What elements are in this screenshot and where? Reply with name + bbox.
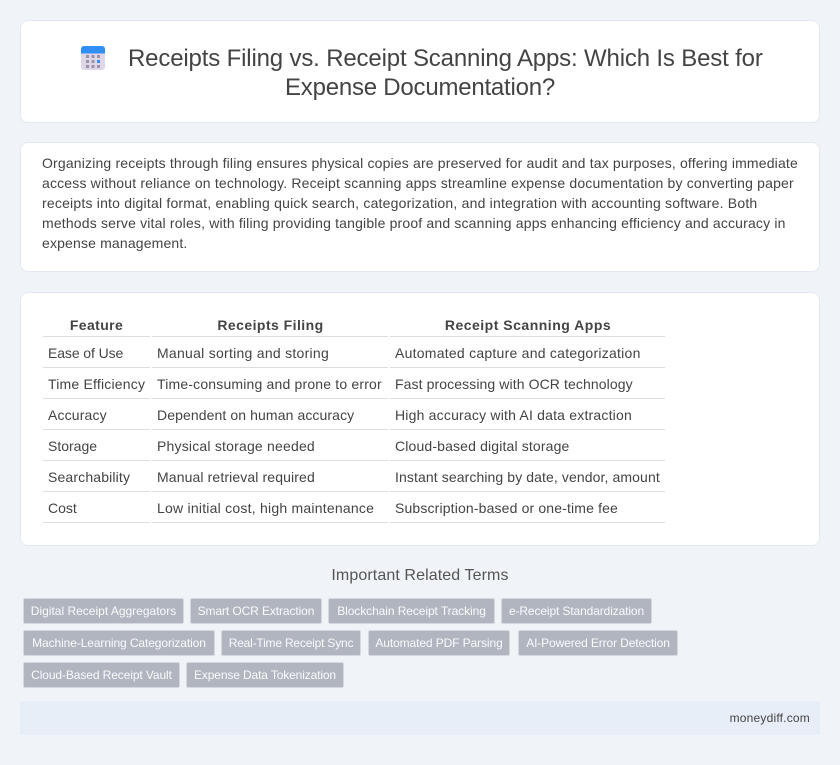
comparison table card xyxy=(20,292,820,546)
related terms tags: Smart OCR Extraction xyxy=(198,604,314,618)
comparison table: Instant searching by date, vendor, amount xyxy=(395,469,660,485)
source credit: moneydiff.com xyxy=(730,711,810,725)
comparison table: Storage xyxy=(48,438,97,454)
related terms tags: Automated PDF Parsing xyxy=(375,636,503,650)
related terms tags: Machine-Learning Categorization xyxy=(32,636,206,650)
title: Receipts Filing vs. Receipt Scanning Apps: Which Is Best for xyxy=(128,45,763,72)
comparison table: Receipt Scanning Apps xyxy=(445,317,611,333)
comparison table: Manual retrieval required xyxy=(157,469,315,485)
footer xyxy=(20,701,820,735)
description card xyxy=(20,142,820,272)
related terms heading: Important Related Terms xyxy=(331,567,509,584)
related terms tags: Blockchain Receipt Tracking xyxy=(337,604,486,618)
comparison table: Searchability xyxy=(48,469,130,485)
description text xyxy=(42,155,798,251)
title xyxy=(128,45,763,101)
description text: expense management. xyxy=(42,235,187,251)
related terms tags: AI-Powered Error Detection xyxy=(526,636,670,650)
comparison table: Automated capture and categorization xyxy=(395,345,641,361)
comparison table: Subscription-based or one-time fee xyxy=(395,500,618,516)
comparison table: Feature xyxy=(70,317,123,333)
title: Expense Documentation? xyxy=(285,74,555,101)
comparison table xyxy=(43,317,665,523)
comparison table: Manual sorting and storing xyxy=(157,345,329,361)
related terms tags xyxy=(23,598,678,688)
comparison table: Physical storage needed xyxy=(157,438,315,454)
description text: methods serve vital roles, with filing providing tangible proof and scanning apps enhancing efficiency and accuracy in xyxy=(42,215,786,231)
comparison table: Receipts Filing xyxy=(217,317,324,333)
comparison table: Accuracy xyxy=(48,407,107,423)
comparison table: Cost xyxy=(48,500,77,516)
description text: access without reliance on technology. Receipt scanning apps streamline expense documentation by converting paper xyxy=(42,175,794,191)
comparison table: Ease of Use xyxy=(48,345,123,361)
title card xyxy=(20,20,820,123)
comparison table: Time Efficiency xyxy=(48,376,145,392)
comparison table: Fast processing with OCR technology xyxy=(395,376,633,392)
description text: receipts into digital format, enabling quick search, categorization, and integration with accounting software. Both xyxy=(42,195,757,211)
comparison table: Low initial cost, high maintenance xyxy=(157,500,374,516)
description text: Organizing receipts through filing ensures physical copies are preserved for audit and tax purposes, offering immediate xyxy=(42,155,798,171)
comparison table: Time-consuming and prone to error xyxy=(157,376,382,392)
related terms tags: Digital Receipt Aggregators xyxy=(31,604,176,618)
related terms tags: Cloud-Based Receipt Vault xyxy=(31,668,172,682)
related terms tags: e-Receipt Standardization xyxy=(509,604,644,618)
comparison table: Cloud-based digital storage xyxy=(395,438,570,454)
comparison table: Dependent on human accuracy xyxy=(157,407,354,423)
related terms tags: Real-Time Receipt Sync xyxy=(229,636,353,650)
related terms tags: Expense Data Tokenization xyxy=(194,668,336,682)
comparison table: High accuracy with AI data extraction xyxy=(395,407,632,423)
icon: calendar xyxy=(81,46,105,70)
